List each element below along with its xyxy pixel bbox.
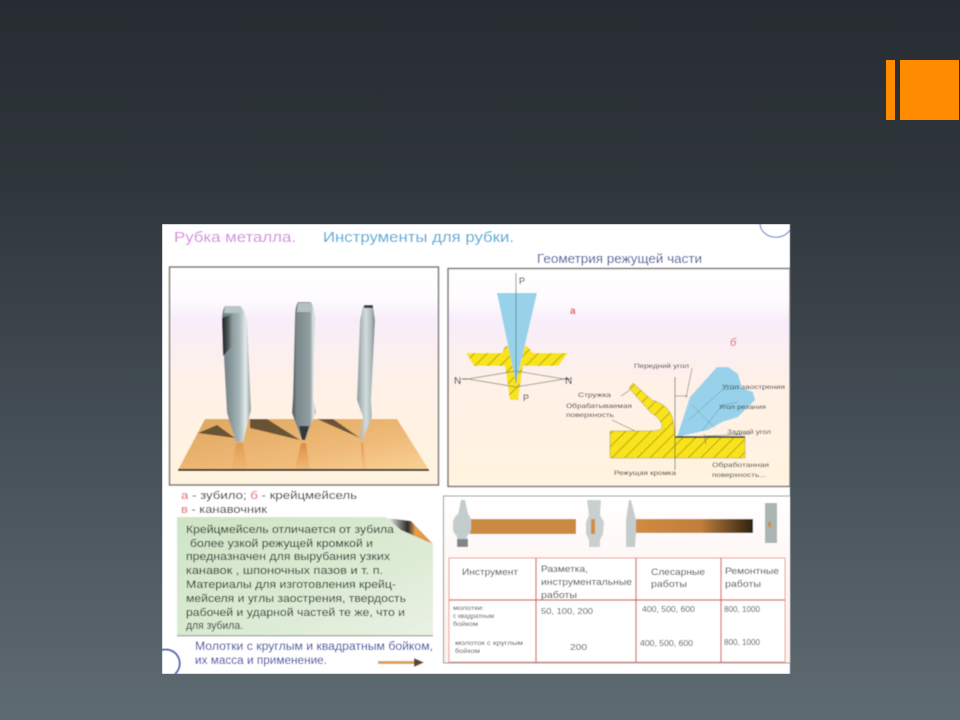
text block: cross-cut chisel description: рабочей и ударной частей те же, что и [186,607,405,619]
hammer side view round face [453,500,576,547]
table: tool use: молоток с круглым [455,641,523,647]
diagram b: cutting part: поверхность [566,412,615,419]
table: tool use: Инструмент [462,567,519,578]
heading: slide title [174,230,514,246]
chisel b [292,302,316,440]
table: tool use: 400, 500, 600 [640,639,694,648]
table: tool use: бойком [455,648,480,655]
diagram b: cutting part: Передний угол [634,362,689,370]
diagram b: cutting part: Угол резания [719,404,767,411]
diagram a: wedge force: P [523,393,529,403]
diagram b: cutting part: поверхность... [712,472,766,479]
table: tool use: 200 [570,643,588,652]
chisel c [357,306,375,440]
icon: orange corner accent [886,60,959,120]
text block: cross-cut chisel description: Крейцмейсель отличается от зубила [186,524,395,536]
text block: cross-cut chisel description [177,517,433,636]
caption: hammers note: Молотки с круглым и квадратным бойком, [195,641,433,653]
panel: hammers and table [444,496,790,663]
text block: cross-cut chisel description: более узкой режущей кромкой и [190,538,373,550]
legend: tool names [181,490,357,516]
table: tool use: Разметка, [541,564,588,575]
heading: cutting geometry: Геометрия режущей части [537,252,702,266]
diagram a: wedge force: а [570,306,576,317]
panel: cutting geometry diagrams [448,268,790,486]
table: tool use: 50, 100, 200 [541,607,594,616]
diagram b: cutting part: б [730,337,737,349]
icon: pencil [385,517,433,545]
diagram b: cutting part: Обрабатываемая [566,402,633,410]
caption: hammers note [195,641,433,667]
diagram a: wedge force: N [454,376,461,387]
diagram b: cutting part: Стружка [578,392,611,399]
text block: cross-cut chisel description: Материалы для изготовления крейц- [186,579,396,591]
hammer front view square [765,503,777,543]
panel: three chisels [170,267,438,485]
diagram b: cutting part: Задний угол [727,428,771,436]
board [178,419,429,470]
arrow: next [378,658,424,667]
table: tool use: работы [725,579,761,590]
table: tool use: инструментальные [541,577,632,588]
table: tool use: Слесарные [651,567,705,578]
diagram a: wedge force [454,273,576,403]
table: tool use: с квадратным [453,614,494,620]
diagram b: cutting part: Угол заострения [722,384,786,391]
legend: tool names: а - зубило; б - крейцмейсель [181,490,357,502]
table: tool use: бойком [453,621,478,628]
diagram a: wedge force: P [519,276,525,286]
hammer front view [586,500,604,547]
table: tool use: 800, 1000 [724,638,761,647]
table: tool use [449,558,785,662]
diagram b: cutting part: Обработанная [712,461,770,469]
hammer side view square face [626,500,753,547]
diagram a: wedge force: N [565,376,572,387]
chisel a [222,306,251,442]
text block: cross-cut chisel description: мейселя и углы заострения, твердость [186,593,406,605]
table: tool use: работы [541,590,577,601]
table: tool use: 400, 500, 600 [642,605,696,614]
text block: cross-cut chisel description: для зубила. [186,620,243,632]
heading: slide title: Рубка металла. [174,230,296,246]
slide image: metal chopping tools [162,224,790,674]
table: tool use: молотки: [453,606,484,612]
heading: slide title: Инструменты для рубки. [323,230,514,246]
diagram b: cutting part [566,337,786,479]
table: tool use: 800, 1000 [724,605,761,614]
text block: cross-cut chisel description: канавок , шпоночных пазов и т. п. [186,565,383,577]
table: tool use: работы [651,579,687,590]
text block: cross-cut chisel description: предназначен для вырубания узких [186,551,391,563]
caption: hammers note: их масса и применение. [195,655,327,667]
diagram b: cutting part: Режущая кромка [614,470,676,477]
table: tool use: Ремонтные [725,566,779,577]
legend: tool names: в - канавочник [181,504,267,516]
